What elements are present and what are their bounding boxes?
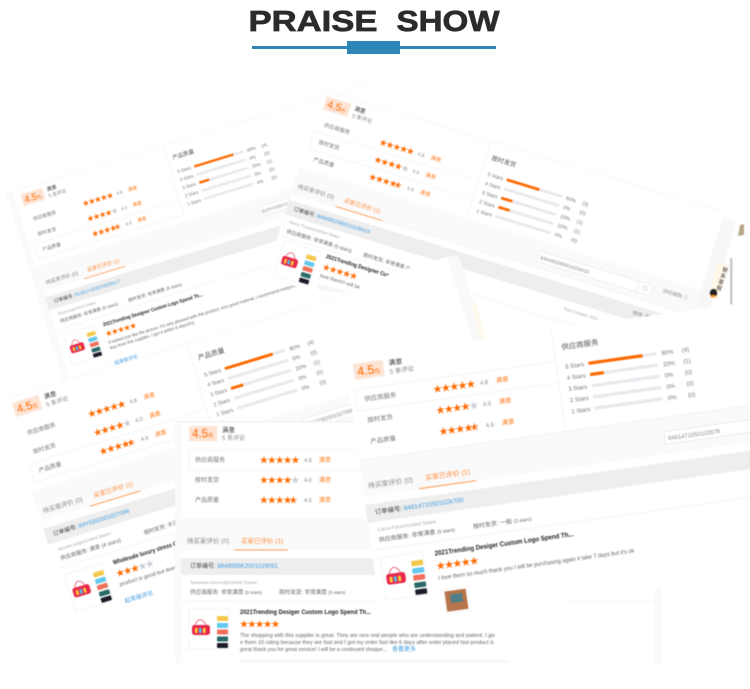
- panel: review card center right: 20%: [663, 361, 676, 368]
- panel: review card left: 4.0: [135, 417, 144, 424]
- panel: review card top left: [6, 80, 450, 423]
- title: SHOW: [396, 6, 500, 38]
- panel: review card top right: 4.0: [411, 169, 420, 176]
- panel: review card left: 89Y0392001027006: [307, 408, 355, 428]
- panel: review card center right: 订单编号: 8461471050102k700: [374, 495, 464, 516]
- panel: review card bottom center: 满意: [319, 476, 331, 484]
- panel: review card center right: 0%: [668, 395, 678, 402]
- panel: review card center right: 待买家评价 (0): [367, 475, 413, 490]
- panel: review card top right: 3 Stars: [481, 190, 499, 201]
- panel: review card center right: 产品质量: [370, 433, 397, 446]
- panel: review card bottom center: ★★★★★: [260, 456, 300, 466]
- panel: review card bottom center: ★: [290, 496, 298, 506]
- panel: review card center right: 5 Stars: [565, 362, 585, 371]
- panel: review card top left: (4): [261, 142, 268, 148]
- panel: review card top right: 按时发货: [318, 138, 341, 152]
- panel: review card top right: 2021Trending Designer Custom Logo Spend Th...: [325, 254, 439, 294]
- review photo: [442, 586, 471, 614]
- panel: review card center right: 4.0: [483, 401, 492, 408]
- panel: review card top left: 5 Stars: [177, 165, 192, 174]
- panel: review card center right: 满意: [388, 357, 403, 367]
- panel: review card left: 满意: [148, 409, 162, 420]
- panel: review card center right: 按时发货: 一般 (3 stars): [473, 514, 532, 531]
- panel: review card center right: 4.8: [480, 380, 489, 387]
- panel: review card center right: 按时发货: [367, 412, 394, 424]
- panel: review card center right: (1): [683, 359, 691, 366]
- panel: review card top left: 0%: [254, 170, 261, 177]
- panel: review card top right: 排序: 最新排序: [632, 309, 665, 325]
- panel: review card bottom center: 买家已评价 (1): [241, 536, 283, 545]
- panel: review card top right: 产品质量: [312, 155, 336, 169]
- panel: review card top left: 按时发货: [37, 225, 57, 238]
- scroll bar fragment: [730, 258, 732, 306]
- panel: review card center right: 2021Trending Desiger Custom Logo Spend Th...: [434, 531, 574, 558]
- panel: review card top right: 满意: [430, 153, 443, 164]
- panel: review card left: 买家已评价 (1): [92, 479, 134, 500]
- panel: review card top right: 评价规则 ⓘ: [662, 287, 689, 302]
- panel: review card top right: (0): [579, 210, 587, 217]
- panel: review card top left: 2 Stars: [184, 189, 200, 198]
- panel: review card top left: 2021Trending Designer Custom Logo Spend Th...: [102, 292, 204, 328]
- panel: review card top right: 按时发货: 非常满意 (5 stars): [362, 251, 425, 277]
- panel: review card left: wooran judge/United States: [57, 531, 112, 552]
- title underline: [252, 41, 496, 54]
- panel: review card top left: 产品质量: [41, 241, 62, 253]
- panel: review card center right: (0): [688, 392, 696, 399]
- side strip: [447, 255, 487, 345]
- panel: review card center right: 0%: [664, 372, 675, 380]
- panel: review card left: 待买家评价 (0): [42, 494, 84, 515]
- panel: review card left: 满意: [154, 428, 168, 439]
- panel: review card top right: 20%: [559, 214, 571, 223]
- panel: review card top left: 3 Stars: [182, 181, 197, 190]
- panel: review card top right: 供应商服务: [323, 121, 352, 136]
- panel: review card center right: ★: [470, 422, 480, 434]
- panel: review card center right: (4): [681, 347, 690, 354]
- icon: contact customer service tab: 客: [717, 277, 725, 287]
- panel: review card left: 起草版评论: [124, 589, 154, 605]
- panel: review card left: ★★★★: [99, 439, 131, 458]
- panel: review card center right: 80%: [661, 349, 675, 357]
- panel: review card bottom center: ★★★★: [260, 496, 292, 506]
- panel: review card top left: 0%: [249, 154, 257, 161]
- panel: review card top left: ★★★★★: [86, 206, 119, 223]
- panel: review card top left: (0): [263, 150, 271, 156]
- panel: review card left: 0%: [301, 384, 311, 392]
- panel: review card top right: Merry Thomas/United States: [289, 219, 340, 240]
- panel: review card left: 80%: [289, 344, 301, 353]
- panel: review card top left: 起草版评论: [114, 353, 139, 367]
- panel: review card top left: (1): [266, 158, 273, 165]
- panel: review card left: ★: [126, 437, 137, 449]
- panel: review card top left: 买家已评价 (1): [86, 256, 121, 274]
- panel: review card top right: 20%: [557, 223, 569, 232]
- panel: review card bottom center: e them 10 rating because they are fast and I got my order fast like 6 days after order placed fast product is: [240, 640, 494, 646]
- panel: review card left: (0): [319, 379, 327, 387]
- panel: review card top right: 2 Stars: [478, 199, 496, 210]
- panel: review card bottom center: 2021Trending Desiger Custom Logo Spend Th...: [240, 609, 371, 616]
- panel: review card bottom center: The shopping with this supplier is great. They are nice real people who are understanding and patient. I giv: [240, 633, 495, 639]
- panel: review card top right: 4.5/5: [326, 100, 347, 116]
- panel: review card top right: 4.8: [417, 151, 425, 159]
- panel: review card center right: 4.6: [486, 422, 495, 429]
- panel: review card left: (4): [307, 339, 315, 347]
- panel: review card bottom center: Tawanea Kennedy/United States: [190, 580, 257, 585]
- panel: review card top left: (0): [271, 174, 278, 181]
- panel: review card bottom center: 5 条评论: [222, 434, 245, 442]
- panel: review card left: 满意: [142, 390, 156, 401]
- panel: review card bottom center: 供应商服务: [195, 456, 225, 464]
- panel: review card center right: 5 条评论: [389, 363, 415, 376]
- panel: review card bottom center: 满意: [319, 496, 331, 504]
- panel: review card top left: 订单编号: 91301Y3250Y929X17: [53, 278, 121, 305]
- panel: review card left: 2 Stars: [213, 398, 231, 409]
- panel: review card left: 4.8: [129, 398, 138, 406]
- panel: review card top left: ★★★★★: [81, 190, 114, 208]
- panel: review card center right: 4 Stars: [566, 373, 586, 382]
- panel: review card center right: ★★★★★: [436, 400, 479, 417]
- panel: review card center right: 8461471050102678: [668, 429, 721, 442]
- panel: review card top right: 待买家评价 (0): [297, 182, 335, 201]
- panel: review card top left: 满意: [45, 183, 58, 193]
- panel: review card top right: ★★★★: [368, 172, 398, 189]
- panel: review card top right: ★★★★★: [373, 155, 410, 174]
- panel: review card top left: 5 条评论: [48, 187, 67, 199]
- panel: review card center right: 买家已评价 (1): [425, 467, 470, 482]
- panel: review card center right: 4.5/5: [356, 362, 381, 379]
- panel: review card top left: 0%: [256, 179, 264, 185]
- panel: review card top right: 5 Stars: [487, 172, 504, 182]
- panel: review card center right: ★★★★★: [436, 556, 479, 572]
- panel: review card center right: 0%: [666, 384, 676, 391]
- panel: review card top right: ★★★★★: [379, 138, 415, 157]
- panel: review card top left: 4.5/5: [23, 190, 42, 205]
- panel: review card bottom center: [175, 421, 662, 663]
- panel: review card left: 5 Stars: [204, 368, 222, 379]
- panel: review card center right: [345, 296, 750, 627]
- panel: review card center right: Carca Parvin/United States: [377, 519, 437, 533]
- title: [248, 6, 500, 38]
- panel: review card left: (0): [310, 349, 318, 357]
- panel: review card left: 4 Stars: [207, 378, 225, 389]
- panel: review card top right: (0): [570, 237, 578, 245]
- panel: review card left: [4, 291, 431, 634]
- panel: review card bottom center: 满意: [222, 425, 236, 434]
- panel: review card left: 按时发货: [32, 441, 57, 456]
- panel: review card left: 4.5/5: [15, 398, 39, 416]
- yellow strip: [471, 302, 487, 345]
- panel: review card top right: love them!!! will be: [319, 273, 361, 291]
- panel: review card bottom center: 待买家评价 (0): [187, 536, 229, 545]
- panel: review card top left: It looked just like the picture. I'm very pleased with this product, very good material, I recommend everyone: [108, 282, 298, 345]
- panel: review card top left: (0): [268, 166, 276, 173]
- panel: review card top right: [265, 89, 738, 404]
- panel: review card top left: 9120Y3250Y9290Y7: [261, 197, 302, 214]
- panel: review card top right: 84949029905102/8415: [539, 255, 590, 276]
- panel: review card bottom center: 供应商服务: 非常满意 (5 stars): [190, 588, 262, 596]
- panel: review card top left: 满意: [132, 199, 143, 209]
- panel: review card left: 0%: [298, 374, 308, 382]
- panel: review card top left: ★★★★★: [104, 320, 137, 338]
- panel: review card top right: (3): [581, 201, 589, 208]
- panel: review card top right: (1): [573, 228, 581, 236]
- panel: review card top right: 供应商服务: 非常满意 (5 stars): [286, 228, 353, 255]
- panel: review card bottom center: 按时发货: 非常满意 (5 stars): [279, 588, 346, 596]
- panel: review card left: 产品质量: [38, 460, 63, 474]
- panel: review card center right: 满意: [498, 395, 512, 406]
- panel: review card top left: 4.8: [116, 189, 124, 196]
- panel: review card center right: 2 Stars: [570, 396, 589, 404]
- panel: review card top right: ★: [393, 180, 403, 191]
- panel: review card top left: 1 Stars: [187, 197, 202, 207]
- panel: review card left: ★★★★★: [87, 399, 127, 420]
- panel: review card left: 4.6: [140, 435, 149, 443]
- panel: review card top left: 4.6: [125, 220, 133, 227]
- panel: review card top right: 60%: [565, 196, 577, 205]
- panel: review card top left: 80%: [246, 145, 256, 153]
- panel: review card top right: 买家已评价 (1): [343, 197, 382, 215]
- panel: review card left: product is good but does not ship on time: [119, 553, 216, 588]
- panel: review card bottom center: 4.0: [304, 478, 312, 484]
- tan fragment: [738, 224, 744, 236]
- panel: review card center right: 满意: [501, 416, 515, 427]
- icon: contact customer service tab: [708, 262, 729, 300]
- panel: review card top right: Time Created: 2021: [563, 306, 600, 322]
- panel: review card top right: 0%: [554, 232, 563, 240]
- panel: review card bottom center: ★★★★★: [260, 476, 300, 486]
- panel: review card top left: 按时发货: 非常满意 (5 stars): [127, 281, 183, 304]
- panel: review card bottom center: 订单编号: 8849599K2001029051: [190, 562, 279, 570]
- panel: review card top left: 供应商服务: [32, 209, 57, 223]
- panel: review card left: 按时发货: 不满意 (2 stars): [143, 510, 205, 537]
- panel: review card top left: 满意: [136, 215, 148, 224]
- mask over top right card lower area: [300, 257, 487, 362]
- panel: review card left: 产品质量: [197, 345, 226, 362]
- panel: review card bottom center: 4.6: [304, 498, 312, 504]
- panel: review card top right: 满意: [424, 171, 438, 182]
- panel: review card left: 供应商服务: [26, 421, 57, 437]
- panel: review card left: (0): [316, 369, 324, 377]
- panel: review card top right: 按时发货: [491, 153, 517, 169]
- panel: review card top right: ★★★★★: [322, 262, 358, 281]
- panel: review card top right: 满意: [353, 105, 367, 116]
- panel: review card left: 满意: [43, 389, 57, 401]
- icon: contact customer service tab: 服: [715, 284, 723, 293]
- panel: review card top left: 产品质量: [171, 147, 195, 162]
- panel: review card left: (1): [313, 359, 321, 367]
- panel: review card left: ★★★★★: [93, 418, 133, 439]
- panel: review card top left: buy from this supplier. I got it within 6 days/my: [109, 320, 196, 350]
- panel: review card top right: 4 Stars: [484, 181, 501, 191]
- panel: review card center right: 供应商服务: [561, 337, 600, 352]
- panel: review card left: 1 Stars: [216, 408, 234, 418]
- panel: review card bottom center: 查看更多: [392, 645, 416, 653]
- panel: review card left: 0%: [292, 355, 301, 363]
- panel: review card left: 订单编号: 89Y0392001027006: [52, 507, 131, 538]
- panel: review card left: 5 条评论: [45, 394, 69, 409]
- icon: contact customer service tab: 联: [721, 265, 729, 275]
- panel: review card top left: ★★★★: [91, 223, 118, 239]
- panel: review card center right: I love them so much thank you I will be purchasing again it take 7 days but it's ok: [438, 548, 635, 582]
- title: PRAISE: [248, 6, 378, 38]
- panel: review card center right: 供应商服务: 非常满意 (5 stars): [378, 525, 456, 544]
- panel: review card bottom center: great thank you for great service! I will be a continued shoppe...: [240, 647, 387, 653]
- panel: review card top right: 1 Stars: [476, 208, 493, 219]
- panel: review card bottom center: 产品质量: [195, 496, 219, 504]
- panel: review card center right: (0): [686, 381, 694, 388]
- panel: review card top right: 5 条评论: [351, 111, 374, 125]
- panel: review card bottom center: 按时发货: [195, 476, 219, 484]
- panel: review card top right: 4.6: [406, 186, 415, 194]
- panel: review card top left: 满意: [127, 184, 138, 194]
- panel: review card center right: 3 Stars: [568, 385, 588, 393]
- panel: review card top right: (1): [576, 219, 584, 227]
- panel: review card left: ★★★★★: [115, 559, 155, 580]
- panel: review card bottom center: ★★★★★: [240, 620, 280, 630]
- panel: review card top right: 订单编号: 84949029905102/8415: [293, 205, 371, 236]
- panel: review card left: 3 Stars: [210, 388, 228, 399]
- panel: review card top left: ★: [113, 221, 122, 232]
- icon: contact customer service tab: 系: [719, 271, 727, 281]
- panel: review card top left: 20%: [251, 162, 261, 169]
- panel: review card center right: (0): [685, 370, 693, 377]
- panel: review card top right: 满意: [419, 188, 432, 199]
- comment bar fragment: [317, 284, 344, 294]
- panel: review card left: 供应商服务: 满意 (4 stars): [59, 536, 122, 562]
- panel: review card top left: Savannag/United States: [57, 301, 97, 316]
- panel: review card center right: 1 Stars: [571, 407, 591, 416]
- panel: review card bottom center: 4.5/5: [192, 428, 214, 440]
- panel: review card left: Wholesale luxury stress Custom Logo Spend Th...: [112, 522, 236, 566]
- panel: review card center right: ★★★★★: [433, 379, 476, 396]
- panel: review card top left: 待买家评价 (0): [45, 269, 79, 286]
- panel: review card bottom center: 4.8: [304, 458, 312, 464]
- panel: review card top left: 4 Stars: [179, 173, 195, 182]
- panel: review card top left: 供应商服务: 非常满意 (5 stars): [59, 300, 119, 325]
- panel: review card center right: 满意: [495, 374, 509, 385]
- panel: review card center right: 供应商服务: [364, 390, 397, 403]
- panel: review card top right: 0%: [562, 205, 571, 213]
- panel: review card left: 20%: [295, 364, 307, 373]
- panel: review card top left: 4.0: [120, 205, 128, 211]
- panel: review card bottom center: 满意: [319, 456, 331, 464]
- panel: review card center right: ★★★★: [439, 422, 474, 438]
